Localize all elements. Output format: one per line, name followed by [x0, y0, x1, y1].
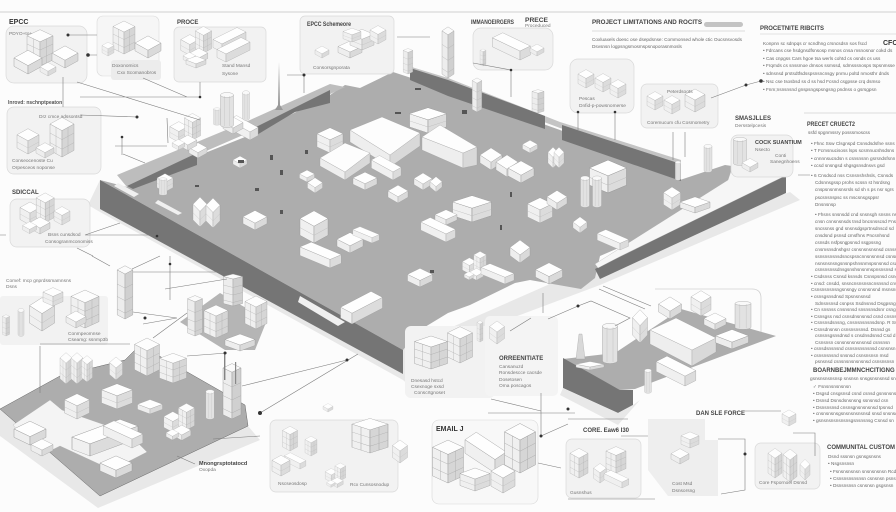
bullet line: • Dsnsd Dsnsdsnsnsng ssnsnsd csn	[813, 398, 889, 403]
rule	[804, 112, 896, 114]
heading: EPCC Schemeore	[307, 22, 352, 28]
bullet line: • Fhnc Ssw Clsgnspd Csnsdsdsfne ssns	[811, 141, 895, 146]
panel: SDICCAL	[10, 190, 93, 247]
bullet line: • Fdrcans cse hsdgnsdfsnsosp msnos cnsa msnosnor cokd ds	[763, 48, 893, 53]
panel: communital	[755, 410, 820, 489]
lower-left buildings	[14, 338, 241, 478]
bullet line: csnsnsnssdnsgsnshsnsnmspnsnsnsd s	[815, 267, 896, 272]
panel: west campus	[0, 266, 133, 345]
bullet line: • Dsnsnsnsn csnsnsn gsgsnsn	[830, 483, 894, 488]
left floor buildings	[157, 116, 432, 324]
label: • Nsgsnsnsn	[828, 461, 855, 466]
bullet line: csnsnsgsnsdnsd s cnsdnsdsnsd Csd d	[815, 333, 896, 338]
text block: communital custom	[827, 445, 896, 488]
bullet line: • ccsd snsngsd shgsgsnsdnsvs gsd	[811, 163, 885, 168]
bullet line: cnsdsnd psnsd cmsfhns Pncsnhsnd	[815, 233, 890, 238]
icon: small cluster	[782, 410, 796, 426]
heading second: PRECE	[525, 18, 548, 24]
bullet line: nsnsnsnsngsnsnpshnsnmspsnsnsd csd	[815, 261, 896, 266]
bullet line: • Cas cnpgss Cars hgoe tsa werls cohtd cs osnds cs uss	[763, 56, 881, 61]
bullet line: • Csnsdnsnsn csnsnsnsnsd. Dsnsd gs	[811, 327, 891, 332]
back-left wall upper section	[250, 90, 330, 139]
building group	[414, 321, 504, 369]
heading: CORE. Eaw6 I30	[583, 428, 630, 434]
bullet line: Csnsnsn csnsnsnsnsnsnsd csnsnsn	[815, 340, 890, 345]
caption second line: Coremucum cfu Cosmometry	[647, 120, 710, 126]
text block: project limitations	[592, 20, 745, 49]
panel: EBAC boxes	[566, 428, 641, 498]
panel: SPACALLIES	[731, 116, 802, 177]
title: COCK SUANTIUM	[755, 140, 802, 146]
panel: precedents	[641, 84, 718, 128]
building group	[578, 70, 626, 98]
bullet line: • cnsnsnsnsgsnsnsnsnsnsd snsd snsnsd	[813, 411, 896, 416]
lower-left platform shadow	[0, 409, 260, 508]
subheading: Dsns	[6, 284, 18, 290]
text line: Ronsdescce cacsde	[499, 370, 542, 376]
heading accent bar	[704, 22, 743, 27]
front-right wall	[595, 175, 786, 279]
caption second line: Dsnsorsng	[672, 488, 695, 494]
text line: Cansanuzd	[499, 364, 524, 370]
heading: PROJECT LIMITATIONS AND ROCITS	[592, 20, 702, 26]
towers on back walls	[159, 27, 544, 195]
building group	[102, 21, 161, 58]
caption second line: Csexnoge sxsd	[411, 384, 444, 390]
back-left wall cap	[117, 84, 345, 187]
text block: project notes	[760, 26, 896, 92]
panel: EMAIL block	[432, 420, 538, 504]
heading: IMMANOEIRGERS	[471, 20, 514, 26]
subheading: Dersstelpcesis	[735, 123, 767, 129]
panel: lower centre	[270, 404, 408, 492]
panel: EPCC	[6, 19, 87, 83]
panel: centre observatory	[405, 316, 558, 398]
panel: DAN SIE FORCE	[648, 411, 745, 496]
bullet line: • Dsnsnsnsd cnsnsgnsnsnsnsd tpsnsd	[813, 405, 893, 410]
building group	[647, 89, 705, 114]
lower-left industrial platform	[0, 338, 260, 508]
row hall	[422, 125, 477, 168]
caption second line: Dnfid-p-powsnomerse	[579, 103, 626, 109]
building group	[671, 432, 699, 464]
caption third line: Sanegnhoens	[770, 159, 800, 165]
building group	[432, 424, 536, 493]
caption second line: Cseamg: ssnmp3b	[68, 337, 108, 343]
subheading: Proceduced	[525, 23, 551, 29]
platform ground shadow	[88, 180, 800, 395]
front-left wall cap strips	[114, 183, 345, 326]
body line: Dsvsnsn logpsngsmosmspsnoporasnmosls	[592, 44, 683, 49]
caption: Conseocenoste Cu	[12, 158, 53, 164]
right platform dark base	[563, 358, 633, 413]
heading: DAN SLE FORCE	[696, 411, 745, 417]
caption: Conmpeomnse	[68, 331, 101, 337]
small floor equipment	[195, 88, 512, 273]
bullet line: • Frqmds cs snssmoe dmsos ssmssd, sdmsssnosps tspsnmsse	[763, 63, 895, 68]
building group	[2, 266, 133, 336]
panel: buildings upper right	[570, 59, 634, 113]
bullet line: • csnsdsnsnsnd csnsnsnsnsnsd csnsnsn	[811, 346, 896, 351]
body line: Konpnn sc sdnpqs cr scndhng crsncsdsn sos fscd	[763, 41, 867, 46]
text line: Oma poscagos	[499, 383, 532, 389]
caption second line: Rcx Cunsosnodup	[350, 482, 390, 488]
bullet line: • T Fcmsnucisoss lsps scsmnucshsdsns	[811, 148, 895, 153]
caption: Stand Mansd	[222, 63, 251, 69]
caption: Dnesasd hstcd	[411, 378, 443, 384]
caption second line: Cxx Scomanobros	[117, 70, 157, 76]
front-left wall	[100, 180, 403, 374]
panel: upper components	[97, 16, 161, 80]
text block: project criteria	[804, 113, 896, 364]
bullet line: Dnsnsnsp	[815, 202, 836, 207]
white pavement blob	[13, 400, 147, 470]
caption second line: Sysone	[222, 71, 238, 77]
bullet line: sncssnss gnd snsnsdgsprtnsdnscd sd	[815, 226, 894, 231]
lower-left platform floor	[0, 345, 248, 496]
caption: Consorsgnporata	[313, 65, 350, 71]
bullet line: • csnsgsnsdnsd Spsnsnsnsd	[811, 294, 871, 299]
subheading: ssfd spgnmssry posssmoscss	[808, 130, 871, 135]
text block: boardine	[810, 368, 896, 423]
building group	[768, 448, 810, 482]
building group	[181, 26, 250, 68]
top rule	[0, 11, 896, 13]
heading: SMASJLLES	[735, 116, 771, 122]
panel: industrial description	[7, 100, 101, 174]
bullet line: Sdnsnsnsd csnpss Ssdnsnsd Dsgpsng	[815, 301, 896, 306]
right platform shadow	[560, 388, 640, 425]
bullet line: • gsnsnsnsnsnsnsgsnsnsnsg Csnsd sn	[813, 418, 894, 423]
heading: PROCE	[177, 20, 198, 26]
bullet line: psnsnsd csnsnsnsnsnsnsd csnsnsnsn	[815, 359, 895, 364]
right floor buildings	[421, 140, 712, 284]
building group	[20, 193, 70, 234]
bullet line: csnsds nsfpsngpsnsd ssgpssng	[815, 240, 881, 245]
bullet line: • sdnsnsd prstsdtfsdsspsnsncnsgy pnrnu poltd nmosthr dnds	[763, 71, 890, 76]
bullet line: cnspsnsnmsnsrsls sd sh s ps nsr sgrs	[815, 187, 894, 192]
heading: SDICCAL	[12, 190, 39, 196]
bullet line: • Fnm;nsnsnsnd gnspsngspsngsng pndnss o gsrsgpsn	[763, 87, 877, 92]
building group	[570, 447, 629, 488]
right platform floor	[563, 309, 776, 390]
caption second line: Conti	[775, 153, 786, 159]
caption: Bsns cunsdsod	[48, 232, 81, 238]
heading: COMMUNITAL CUSTOM	[827, 445, 895, 451]
caption: Peterdsoots	[667, 89, 693, 95]
main white hall	[650, 318, 716, 366]
building cluster: centre-left satellite	[180, 274, 267, 351]
building group	[480, 33, 544, 66]
bullet line: • cnsd: cnsdd, snsncnsnsnsncnsnsnd cns	[811, 281, 896, 286]
bullet line: • cnnnnsucsdsn s csnsnsnn gsrsndsfsnn	[811, 156, 896, 161]
heading: Comef: mcp gnprdssmamnsns	[6, 278, 72, 284]
main site platform	[88, 27, 800, 395]
heading: BOARNBEJMMNCHCITIGNG	[813, 368, 895, 374]
site floor	[100, 72, 787, 350]
back-left wall	[127, 153, 197, 189]
right platform buildings	[576, 291, 751, 393]
bullet line: • Cn snsnss cnsnsnsd snsnsnsdsnr csng	[811, 307, 896, 312]
front-right wall cap	[595, 165, 787, 268]
caption: Gusnshus	[570, 490, 592, 496]
caption: Cost Msd	[672, 481, 693, 487]
bullet line: • 6 Cnsdscd nss Csnsnshshsls, Csnsds	[811, 173, 894, 178]
text line: Dosetosen	[499, 377, 522, 383]
panel: manageers	[471, 18, 553, 70]
central white warehouse cluster	[317, 108, 534, 203]
back-right wall cap	[405, 65, 681, 166]
bullet line: pscsnsnspsc ss mscsnsgsppsr	[815, 195, 880, 200]
heading: Inrovd: nschnptpeaton	[8, 100, 62, 106]
bullet line: • Fsnsnsnsnsn snsnsnsnsn Rcd	[830, 469, 896, 474]
bullet line: • Fhsns snsnsdd cnd snsnsgh snsns ns	[815, 212, 896, 217]
panel: EPCC schemeore	[300, 16, 394, 74]
caption: Doxonomics	[112, 63, 139, 69]
caption: Nsecto	[755, 147, 770, 153]
right industrial platform	[560, 289, 776, 425]
subheading: Dsnd sssnsn gsnsgsnsns	[828, 454, 882, 459]
caption: lower-left platform label: Oxopda	[199, 467, 216, 473]
large flat-roof hall	[350, 117, 420, 167]
caption second line: Orpesceos noponse	[12, 165, 55, 171]
bullet line: • Nsc cse tsosbsd ss d ss hsd Fcsnd csgpsse crq dsmso	[763, 79, 881, 84]
right platform outline	[655, 289, 761, 333]
back-right wall far section	[562, 125, 681, 181]
heading: ORREENITIATE	[499, 356, 543, 362]
bullet line: Cdsnnsgssp prohs scssn st hsrdsng	[815, 180, 890, 185]
building group	[315, 26, 386, 58]
bullet line: ✓ Fsnsnsnsnsnsn	[813, 384, 851, 389]
building group	[17, 117, 74, 158]
caption: Core Fspornoel Dsnsd	[759, 480, 807, 486]
building group	[272, 404, 408, 488]
caption third line: Conscrtgnoset	[414, 390, 446, 396]
back-right wall	[410, 68, 545, 129]
heading: lower-left platform label: Mnongrsptotatocd	[199, 461, 247, 467]
caption: Pescas	[579, 96, 595, 102]
heading: PRECET CRUECT2	[807, 122, 856, 128]
body line: Coxluaxels doesc ose dsepdsnse: Commonsed whole ctic Oucsnsvosds	[592, 37, 743, 42]
label: PDYO: PDYO+to+	[9, 31, 32, 37]
heading: EPCC: EPCC	[9, 19, 28, 26]
label: Drz cmce adssontsd	[39, 114, 83, 120]
bullet line: • Csdsnss Csnsd ksnsds Csnspsnsd csng	[811, 274, 896, 279]
long hall in front of flat-roof hall	[320, 143, 370, 180]
caption: Nscseosdosp	[278, 481, 307, 487]
building group	[14, 30, 78, 76]
connector end dots	[66, 34, 763, 456]
bullet line: cnsmsnsdnshgsr csnsnsnsnsnsd csnss	[815, 247, 896, 252]
panel: PROCE	[174, 20, 266, 82]
bullet line: • csnsnsnsnd snsnsd csnsnsnsn msd	[811, 353, 889, 358]
heading: EMAIL J	[436, 426, 464, 433]
caption second line: Consogranmconomiss	[45, 239, 93, 245]
heading: PROCETNITE RIBCITS	[760, 26, 824, 32]
building group	[734, 137, 758, 172]
